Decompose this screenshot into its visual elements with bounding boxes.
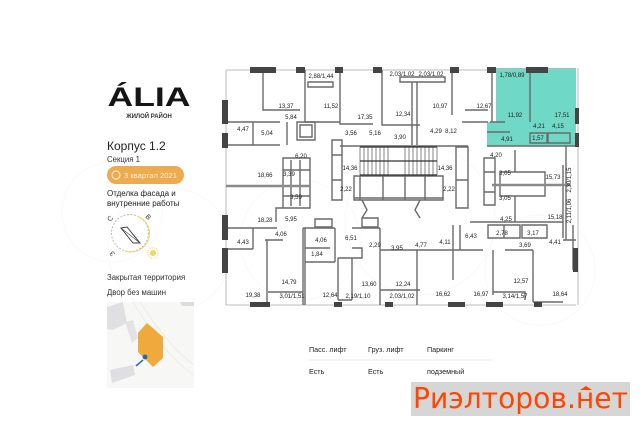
table: building facts: Пасс. лифт (309, 345, 347, 354)
room area labels: 3,59 (290, 195, 302, 201)
room area labels: 6,51 (345, 236, 357, 242)
room area labels: 3,05 (499, 196, 511, 202)
room area labels: 4,06 (315, 238, 327, 244)
room area labels: 2,29 (369, 243, 381, 249)
room area labels: 3,14/1,57 (502, 294, 528, 300)
room area labels: 4,06 (275, 232, 287, 238)
room area labels: 4,21 (533, 124, 545, 130)
compass: В (144, 213, 152, 222)
heading: building: Корпус 1.2 (107, 139, 166, 153)
floor plan (222, 67, 579, 307)
logo: ALIA: ЖИЛОЙ РАЙОН (125, 112, 172, 120)
highlighted apartment (487, 68, 576, 146)
room area labels: 5,84 (285, 115, 297, 121)
room area labels: 18,66 (257, 173, 273, 179)
room area labels: 4,47 (237, 127, 249, 133)
room area labels: 5,16 (369, 131, 381, 137)
room area labels: 14,36 (342, 166, 358, 172)
text: finishing: внутренние работы (107, 199, 180, 208)
room area labels: 12,57 (513, 279, 529, 285)
room area labels: 8,12 (445, 129, 457, 135)
room area labels: 11,52 (324, 104, 339, 110)
room area labels: 4,25 (500, 217, 512, 223)
room area labels: 4,43 (237, 240, 249, 246)
table: building facts: Груз. лифт (368, 345, 404, 354)
room area labels: 12,67 (476, 104, 492, 110)
room area labels: 17,35 (357, 115, 373, 121)
centre core (332, 140, 468, 208)
room area labels (237, 72, 573, 300)
table: building facts: подземный (427, 367, 464, 376)
room area labels: 4,41 (549, 240, 561, 246)
compass (106, 213, 158, 258)
room area labels: 2,03/1,02 (389, 72, 415, 78)
table: building facts: Есть (368, 367, 384, 376)
room area labels: 4,77 (415, 243, 427, 249)
room area labels: 4,11 (439, 240, 451, 246)
room area labels: 13,37 (278, 104, 294, 110)
room area labels: 11,92 (508, 113, 523, 119)
compass: З (109, 249, 117, 257)
text: features: Закрытая территория (107, 273, 185, 282)
room area labels: 6,20 (295, 154, 307, 160)
room area labels: 12,34 (395, 112, 411, 118)
logo: ALIA: ÁLIA (108, 81, 190, 112)
room area labels: 5,95 (285, 217, 297, 223)
room area labels: 5,04 (261, 131, 273, 137)
lower rooms (225, 228, 283, 302)
badge: completion quarter (107, 166, 184, 184)
room area labels: 13,60 (361, 282, 377, 288)
room area labels: 3,56 (345, 131, 357, 137)
right block (484, 150, 545, 222)
room area labels: 2,19/1,10 (345, 294, 371, 300)
logo: ALIA (108, 81, 190, 120)
room area labels: 3,01/1,51 (279, 294, 305, 300)
room area labels: 1,84 (311, 252, 323, 258)
room area labels: 12,24 (395, 282, 411, 288)
left bathrooms and column (276, 158, 310, 222)
room area labels: 14,36 (437, 166, 453, 172)
dark window blocks (222, 67, 579, 307)
room area labels: 2,30/1,15 (567, 167, 573, 193)
room area labels: 4,29 (430, 129, 442, 135)
room area labels: 17,51 (554, 113, 570, 119)
room area labels: 1,78/0,89 (499, 73, 525, 79)
room area labels: 16,62 (435, 292, 451, 298)
text: features: Двор без машин (107, 288, 166, 297)
room area labels: 1,57 (532, 136, 544, 142)
text: section: Секция 1 (107, 155, 140, 164)
room area labels: 6,43 (465, 234, 477, 240)
room area labels: 4,91 (501, 137, 513, 143)
room area labels: 2,78 (496, 231, 508, 237)
room area labels: 18,28 (257, 218, 273, 224)
room area labels: 4,20 (490, 153, 502, 159)
room area labels: 12,64 (322, 293, 338, 299)
room area labels: 15,18 (547, 215, 563, 221)
room area labels: 3,69 (519, 243, 531, 249)
compass: С (106, 215, 115, 223)
room area labels: 3,39 (283, 172, 295, 178)
room area labels: 3,17 (527, 231, 539, 237)
room area labels: 15,73 (545, 175, 561, 181)
room area labels: 3,95 (391, 246, 403, 252)
room area labels: 4,15 (552, 124, 564, 130)
room area labels: 2,88/1,44 (308, 74, 334, 80)
location map (107, 302, 194, 388)
text: finishing: Отделка фасада и (107, 189, 176, 198)
stair flights (360, 147, 437, 175)
room area labels: 2,03/1,02 (389, 294, 415, 300)
room area labels: 3,05 (499, 171, 511, 177)
room area labels: 14,79 (281, 280, 297, 286)
walls (226, 68, 578, 305)
thick horizontal partitions (226, 185, 570, 186)
room area labels: 3,90 (394, 135, 406, 141)
room area labels: 2,11/1,06 (567, 198, 573, 223)
room area labels: 2,03/1,02 (418, 72, 444, 78)
room area labels: 10,97 (432, 104, 448, 110)
watermark: Риэлторов.нет (413, 382, 628, 415)
room area labels: 2,22 (340, 187, 352, 193)
table: building facts: Паркинг (427, 345, 454, 354)
table: building facts: Есть (309, 367, 325, 376)
room area labels: 18,64 (552, 292, 568, 298)
table: building facts (309, 345, 492, 376)
badge: completion quarter: 3 квартал 2021 (124, 171, 177, 180)
room area labels: 19,38 (245, 293, 261, 299)
room area labels: 16,97 (473, 292, 489, 298)
room area labels: 2,22 (443, 187, 455, 193)
text: features (107, 273, 185, 297)
